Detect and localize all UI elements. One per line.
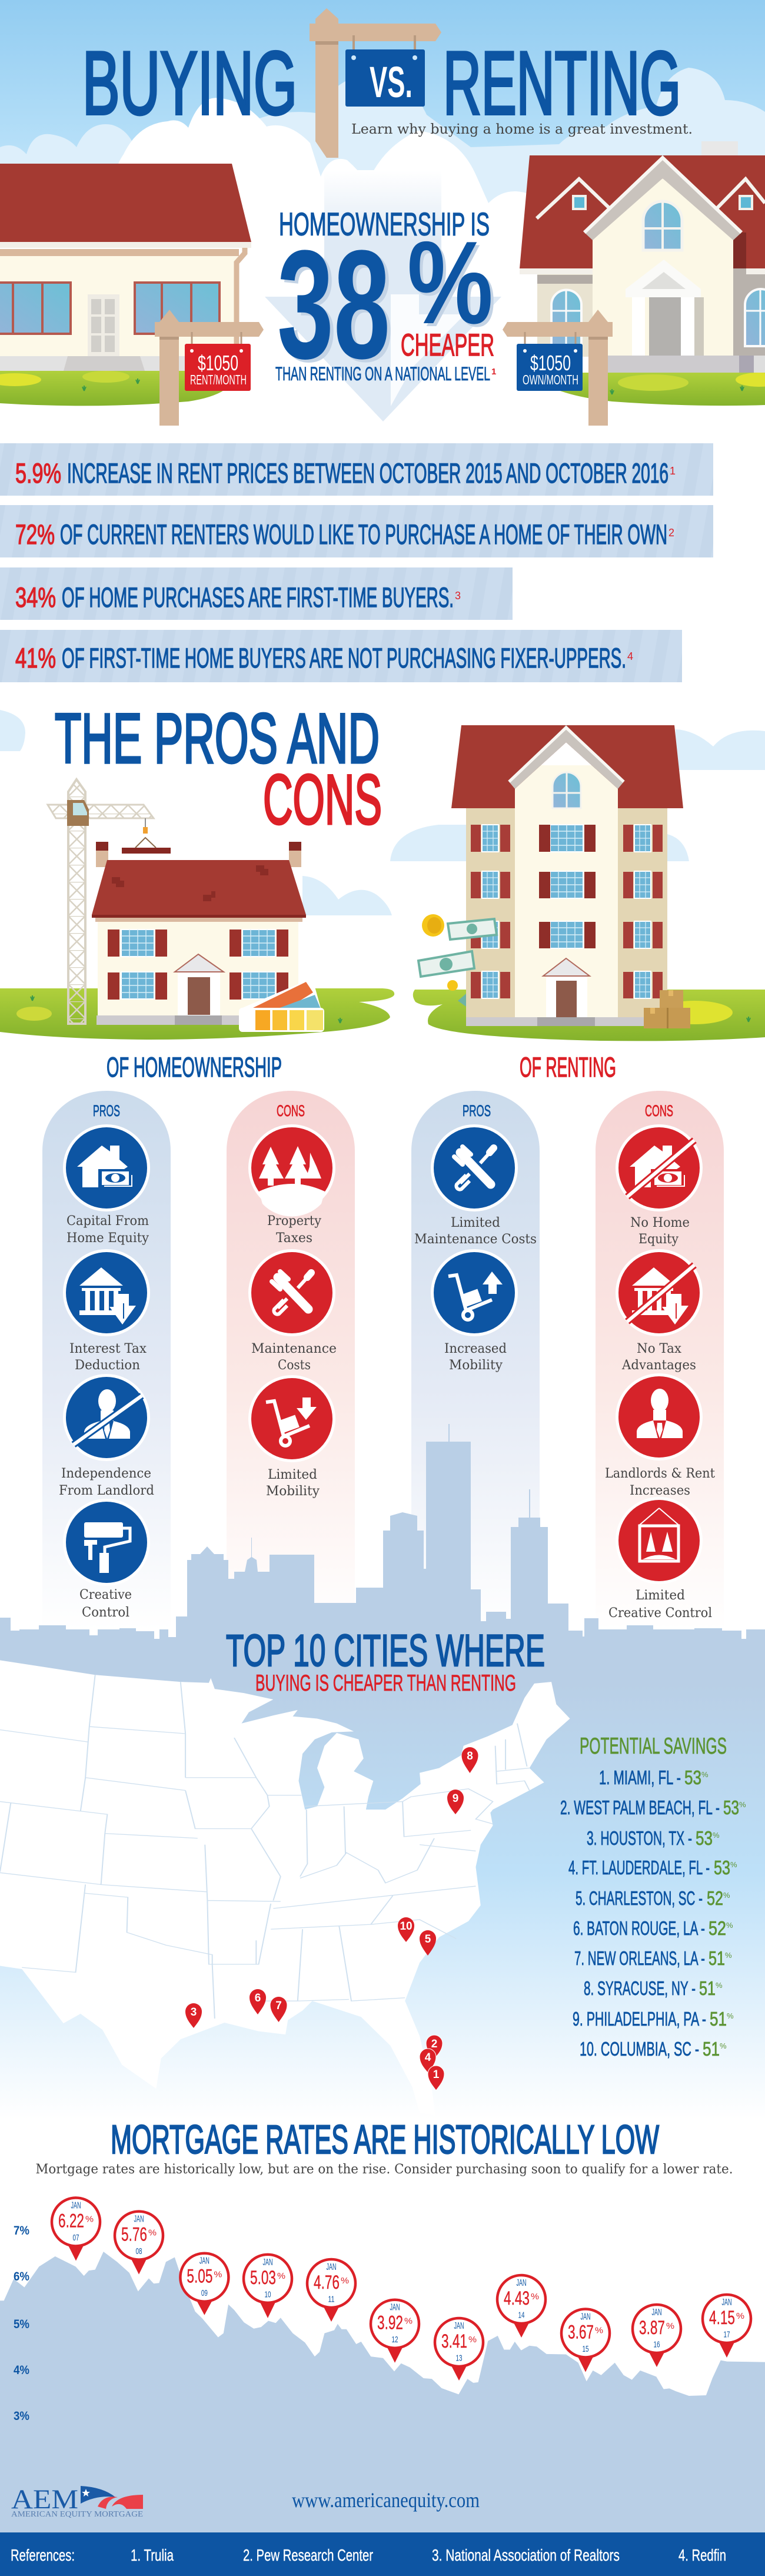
pin 1 miami: 1 xyxy=(433,2069,440,2081)
rate pin: january 2013: JAN xyxy=(454,2321,464,2331)
rate pin: january 2009: % xyxy=(214,2270,222,2280)
references footer: 2. Pew Research Center xyxy=(243,2546,373,2564)
rate pin: january 2017: % xyxy=(736,2311,744,2321)
rate pin: january 2008 xyxy=(115,2212,163,2275)
list: potential savings: % xyxy=(739,1800,746,1809)
list: potential savings: 51 xyxy=(710,2008,727,2030)
stat bar: first-time buyers xyxy=(0,567,513,620)
rate pin: january 2008: JAN xyxy=(134,2215,144,2225)
label: no home equity xyxy=(630,1215,690,1247)
rate pin: january 2016: % xyxy=(666,2321,674,2331)
label: interest tax deduction: Deduction xyxy=(75,1357,140,1373)
chart axis labels: 4% xyxy=(14,2363,29,2377)
column: homeownership pros: PROS xyxy=(93,1102,120,1120)
chart axis labels xyxy=(14,2224,29,2423)
label: creative control: Control xyxy=(82,1605,129,1620)
rate pin: january 2014: % xyxy=(531,2292,539,2302)
label: increased mobility: Increased xyxy=(444,1341,507,1356)
chart axis labels: 6% xyxy=(14,2270,29,2283)
label: limited maintenance costs: Limited xyxy=(451,1215,500,1230)
rate pin: january 2017: 17 xyxy=(724,2330,730,2339)
heading: top 10 cities xyxy=(226,1626,545,1696)
pin 3 houston xyxy=(185,2003,202,2028)
rate pin: january 2009: 5.05 xyxy=(187,2266,212,2287)
rate pin: january 2012: 3.92 xyxy=(377,2312,403,2333)
rate pin: january 2012: JAN xyxy=(390,2303,400,2313)
rate pin: january 2011: JAN xyxy=(326,2262,337,2272)
left grass xyxy=(0,371,237,406)
chart axis labels: 7% xyxy=(14,2224,29,2238)
label: independence from landlord: Independence xyxy=(61,1466,151,1481)
crane xyxy=(48,779,171,1024)
map of the united states xyxy=(0,1660,570,2116)
rent sign: RENT/MONTH xyxy=(190,372,247,387)
heading: top 10 cities: BUYING IS CHEAPER THAN RENTING xyxy=(255,1671,516,1696)
icon: limited creative control xyxy=(616,1497,703,1584)
rate pin: january 2017: 4.15 xyxy=(709,2307,735,2328)
rate pin: january 2015: 3.67 xyxy=(568,2322,594,2343)
pin 8 syracuse: 8 xyxy=(467,1750,473,1762)
icon: interest tax deduction xyxy=(63,1249,150,1336)
icon: capital from home equity xyxy=(63,1124,150,1211)
list: potential savings: 53 xyxy=(714,1857,730,1878)
column: homeownership pros xyxy=(59,1102,154,1620)
label: maintenance costs: Costs xyxy=(278,1357,311,1373)
subhead: of homeownership: OF HOMEOWNERSHIP xyxy=(107,1051,282,1083)
references footer xyxy=(0,2532,765,2576)
label: limited maintenance costs xyxy=(414,1215,537,1247)
title: the pros and cons xyxy=(55,699,382,839)
rate pin: january 2016 xyxy=(633,2305,681,2367)
label: interest tax deduction: Interest Tax xyxy=(69,1341,147,1356)
list: potential savings: % xyxy=(713,1831,720,1840)
pin 4 ft lauderdale: 4 xyxy=(425,2051,431,2064)
rate pin: january 2014: JAN xyxy=(517,2278,526,2288)
column: renting pros: PROS xyxy=(463,1102,491,1120)
label: property taxes xyxy=(267,1213,321,1246)
stat bar: current renters xyxy=(0,505,713,557)
signpost with VS sign xyxy=(310,8,441,158)
label: no home equity: No Home xyxy=(630,1215,690,1230)
column: renting cons xyxy=(605,1102,715,1621)
rate pin: january 2014: 4.43 xyxy=(504,2288,530,2309)
rate pin: january 2010 xyxy=(244,2255,292,2318)
label: independence from landlord xyxy=(59,1466,154,1498)
headline: 38 percent cheaper: % xyxy=(407,217,493,348)
map section background xyxy=(0,1684,765,2119)
rate pin: january 2013: 3.41 xyxy=(441,2331,467,2352)
label: no tax advantages xyxy=(621,1341,696,1373)
pin 2 west palm beach: 2 xyxy=(431,2038,437,2050)
rate pin: january 2011: 11 xyxy=(328,2295,334,2304)
rate pin: january 2009 xyxy=(180,2253,228,2315)
rate pin: january 2016: 16 xyxy=(653,2339,660,2350)
logo: american equity mortgage xyxy=(11,2484,143,2519)
references footer: 1. Trulia xyxy=(131,2546,174,2564)
mortgage rates description: Mortgage rates are historically low, but are on the rise. Consider purchasing soon to qualify for a lower rate. xyxy=(35,2162,733,2177)
label: limited mobility: Limited xyxy=(268,1467,317,1482)
rate pin: january 2009: JAN xyxy=(199,2256,209,2266)
rate pin: january 2011: 4.76 xyxy=(314,2272,340,2293)
arrow behind headline xyxy=(265,170,501,421)
icon: maintenance costs xyxy=(248,1249,335,1336)
right house xyxy=(520,141,765,373)
heading: top 10 cities: TOP 10 CITIES WHERE xyxy=(226,1626,545,1676)
pin 4 ft lauderdale xyxy=(420,2049,436,2073)
headline: 38 percent cheaper: 38 xyxy=(281,221,394,394)
rate pin: january 2008: 5.76 xyxy=(121,2224,147,2245)
rate pin: january 2015: 15 xyxy=(583,2344,588,2354)
stat bar: first-time buyers: 34% xyxy=(15,582,56,613)
label: capital from home equity: Capital From xyxy=(66,1213,149,1229)
rate pin: january 2009: 09 xyxy=(201,2288,208,2298)
label: creative control: Creative xyxy=(79,1587,132,1602)
rate pin: january 2014 xyxy=(497,2275,546,2338)
icon: no home equity xyxy=(616,1124,703,1211)
rate pin: january 2007: 6.22 xyxy=(58,2210,84,2231)
list: potential savings: 52 xyxy=(707,1887,723,1909)
rate pin: january 2012: 12 xyxy=(392,2335,398,2345)
list: potential savings: 51 xyxy=(709,1947,725,1969)
pin 5 charleston: 5 xyxy=(425,1933,431,1946)
grass under homeowner house xyxy=(0,988,394,1040)
label: maintenance costs: Maintenance xyxy=(251,1341,337,1356)
list: potential savings: % xyxy=(701,1770,709,1779)
icon: property taxes xyxy=(248,1124,335,1216)
icon: creative control xyxy=(63,1499,150,1586)
rate pin: january 2010: JAN xyxy=(262,2258,273,2268)
pin 10 columbia: 10 xyxy=(400,1920,413,1933)
rate pin: january 2014: 14 xyxy=(518,2310,525,2321)
list: potential savings: 53 xyxy=(684,1767,701,1788)
pin 2 west palm beach xyxy=(426,2035,443,2059)
rate pin: january 2013 xyxy=(435,2318,483,2381)
title: buying vs renting: BUYING xyxy=(82,33,297,133)
rate pin: january 2008: % xyxy=(148,2228,157,2238)
rental building xyxy=(451,725,683,1026)
list: potential savings: 51 xyxy=(703,2038,720,2060)
headline: 38 percent cheaper: THAN RENTING ON A NATIONAL LEVEL xyxy=(275,363,490,384)
rate pin: january 2010: % xyxy=(277,2271,285,2281)
title: buying vs renting xyxy=(82,33,681,133)
stat bar: current renters: 2 xyxy=(668,527,674,539)
clouds behind pros and cons xyxy=(0,710,765,915)
label: increased mobility xyxy=(444,1341,507,1373)
rent sign: $1050 xyxy=(198,351,238,375)
rate pin: january 2011: % xyxy=(341,2276,349,2286)
area chart: mortgage rates xyxy=(0,2252,765,2533)
list: potential savings: 53 xyxy=(723,1797,739,1818)
pin 3 houston: 3 xyxy=(191,2006,197,2019)
pin 8 syracuse xyxy=(461,1747,478,1773)
label: property taxes: Taxes xyxy=(276,1230,312,1246)
headline: 38 percent cheaper: % xyxy=(410,220,496,351)
logo: american equity mortgage: AEM xyxy=(11,2484,78,2515)
label: increased mobility: Mobility xyxy=(449,1357,503,1373)
subhead: of renting: OF RENTING xyxy=(520,1051,616,1083)
list: potential savings: 52 xyxy=(709,1917,726,1939)
label: independence from landlord: From Landlord xyxy=(59,1483,154,1498)
label: property taxes: Property xyxy=(267,1213,321,1229)
moving boxes xyxy=(644,990,690,1028)
stat bar: rent prices: 5.9% xyxy=(15,457,61,489)
rate pin: january 2015: JAN xyxy=(580,2312,591,2322)
rate pin: january 2011 xyxy=(307,2259,355,2322)
title: the pros and cons: CONS xyxy=(263,761,382,839)
label: landlords and rent increases: Landlords & Rent xyxy=(605,1466,715,1481)
stat bar: current renters: 72% xyxy=(15,519,55,550)
label: no tax advantages: No Tax xyxy=(637,1341,681,1356)
list: potential savings xyxy=(560,1734,746,2060)
headline: 38 percent cheaper: CHEAPER xyxy=(401,328,494,363)
list: potential savings: 8. SYRACUSE, NY - xyxy=(584,1977,696,1999)
website url: www.americanequity.com xyxy=(292,2488,480,2512)
label: landlords and rent increases: Increases xyxy=(630,1483,690,1498)
label: no home equity: Equity xyxy=(638,1231,678,1247)
hero sky with clouds xyxy=(0,0,765,206)
column: homeownership cons xyxy=(248,1102,337,1499)
left house xyxy=(0,164,251,371)
pin 10 columbia xyxy=(398,1917,414,1942)
rate pin: january 2007 xyxy=(52,2198,100,2260)
headline: 38 percent cheaper: 1 xyxy=(491,367,496,377)
stat bar: rent prices: 1 xyxy=(670,465,676,477)
label: limited creative control: Limited xyxy=(636,1588,685,1603)
icon: limited maintenance costs xyxy=(431,1124,518,1211)
references footer: References: xyxy=(11,2546,75,2564)
stat bar: first-time buyers: 3 xyxy=(455,590,461,602)
pin 5 charleston xyxy=(420,1930,436,1956)
column: homeownership cons: CONS xyxy=(277,1102,305,1120)
rate pin: january 2013: % xyxy=(468,2335,477,2345)
pin 7 new orleans xyxy=(271,1997,287,2022)
headline: 38 percent cheaper: 38 xyxy=(277,218,390,391)
rate pin: january 2010: 5.03 xyxy=(250,2267,276,2288)
label: limited creative control xyxy=(608,1588,712,1621)
list: potential savings: 51 xyxy=(699,1977,716,1999)
rate pin: january 2016: JAN xyxy=(652,2308,661,2318)
rate pin: january 2010: 10 xyxy=(265,2289,271,2299)
rate pin: january 2007: JAN xyxy=(71,2200,81,2211)
list: potential savings: 10. COLUMBIA, SC - xyxy=(580,2038,699,2060)
label: limited mobility xyxy=(266,1467,320,1499)
panel backgrounds: pros and cons columns xyxy=(42,1091,724,1631)
label: maintenance costs xyxy=(251,1341,337,1373)
title: the pros and cons: THE PROS AND xyxy=(55,699,380,778)
pin 9 philadelphia: 9 xyxy=(453,1792,458,1805)
paint swatch fan xyxy=(239,978,324,1032)
rate pin: january 2017 xyxy=(703,2295,751,2358)
grass under rental building xyxy=(413,990,765,1041)
list: potential savings: % xyxy=(723,1891,730,1900)
column: renting pros xyxy=(414,1102,537,1373)
column: renting cons: CONS xyxy=(645,1102,673,1120)
coins and dollar bills xyxy=(418,914,497,1007)
city skyline xyxy=(0,1424,765,1707)
icon: independence from landlord xyxy=(63,1374,150,1461)
stat bar: fixer-uppers: 4 xyxy=(627,650,633,662)
stat bar: fixer-uppers xyxy=(0,630,682,682)
icon: limited mobility xyxy=(248,1375,335,1462)
own sign: $1050 xyxy=(530,351,571,375)
own sign xyxy=(503,310,613,426)
rate pin: january 2012 xyxy=(371,2300,419,2363)
right grass xyxy=(533,373,765,406)
rate pin: january 2017: JAN xyxy=(721,2298,732,2308)
rate pin: january 2007: 07 xyxy=(73,2233,79,2243)
rate pin: january 2015 xyxy=(561,2309,610,2372)
label: limited maintenance costs: Maintenance Costs xyxy=(414,1231,537,1247)
homeowner house xyxy=(92,842,306,1025)
subtitle: Learn why buying a home is a great investment. xyxy=(351,122,693,137)
rate pin: january 2015: % xyxy=(595,2325,603,2336)
chart axis labels: 3% xyxy=(14,2409,29,2423)
chart axis labels: 5% xyxy=(14,2318,29,2331)
list: potential savings: % xyxy=(726,1921,733,1930)
rate pin: january 2013: 13 xyxy=(455,2353,463,2363)
list: potential savings: % xyxy=(725,1951,732,1960)
list: potential savings: % xyxy=(720,2041,727,2050)
signpost with VS sign: VS. xyxy=(370,58,413,107)
pin 1 miami xyxy=(428,2066,444,2090)
label: capital from home equity: Home Equity xyxy=(66,1230,149,1246)
map pins xyxy=(185,1747,478,2090)
pin 7 new orleans: 7 xyxy=(275,2000,282,2012)
label: no tax advantages: Advantages xyxy=(621,1357,696,1373)
list: potential savings: 3. HOUSTON, TX - xyxy=(587,1827,692,1849)
pin 6 baton rouge: 6 xyxy=(255,1992,261,2004)
own sign: OWN/MONTH xyxy=(523,372,578,387)
references footer: 4. Redfin xyxy=(678,2546,726,2564)
references footer: 3. National Association of Realtors xyxy=(432,2546,620,2564)
stat bar: fixer-uppers: 41% xyxy=(15,642,56,673)
pin 9 philadelphia xyxy=(447,1790,464,1814)
icon: landlords and rent increases xyxy=(616,1373,703,1460)
label: landlords and rent increases xyxy=(605,1466,715,1498)
logo: american equity mortgage: AMERICAN EQUITY MORTGAGE xyxy=(11,2510,143,2519)
list: potential savings: % xyxy=(727,2011,734,2020)
highlight across arrow xyxy=(391,294,465,406)
label: interest tax deduction xyxy=(69,1341,147,1373)
label: capital from home equity xyxy=(66,1213,149,1246)
rate pin: january 2012: % xyxy=(404,2316,413,2326)
label: limited mobility: Mobility xyxy=(266,1483,320,1499)
list: potential savings: 1. MIAMI, FL - xyxy=(599,1767,681,1788)
stat bar: rent prices xyxy=(0,443,713,496)
list: potential savings: 53 xyxy=(696,1827,713,1849)
headline: 38 percent cheaper: HOMEOWNERSHIP IS xyxy=(279,206,490,243)
label: creative control xyxy=(79,1587,132,1620)
rent sign xyxy=(155,310,264,426)
icon: increased mobility xyxy=(431,1249,518,1336)
list: potential savings: % xyxy=(730,1860,737,1869)
icon: no tax advantages xyxy=(616,1249,703,1336)
rate pin: january 2008: 08 xyxy=(135,2246,142,2256)
rate pin: january 2007: % xyxy=(85,2215,94,2224)
label: limited creative control: Creative Control xyxy=(608,1605,712,1621)
stat bar: first-time buyers: OF HOME PURCHASES ARE FIRST-TIME BUYERS. xyxy=(62,582,454,613)
pin 6 baton rouge xyxy=(250,1989,266,2014)
list: potential savings: % xyxy=(716,1981,723,1990)
rate pin: january 2016: 3.87 xyxy=(639,2317,665,2338)
